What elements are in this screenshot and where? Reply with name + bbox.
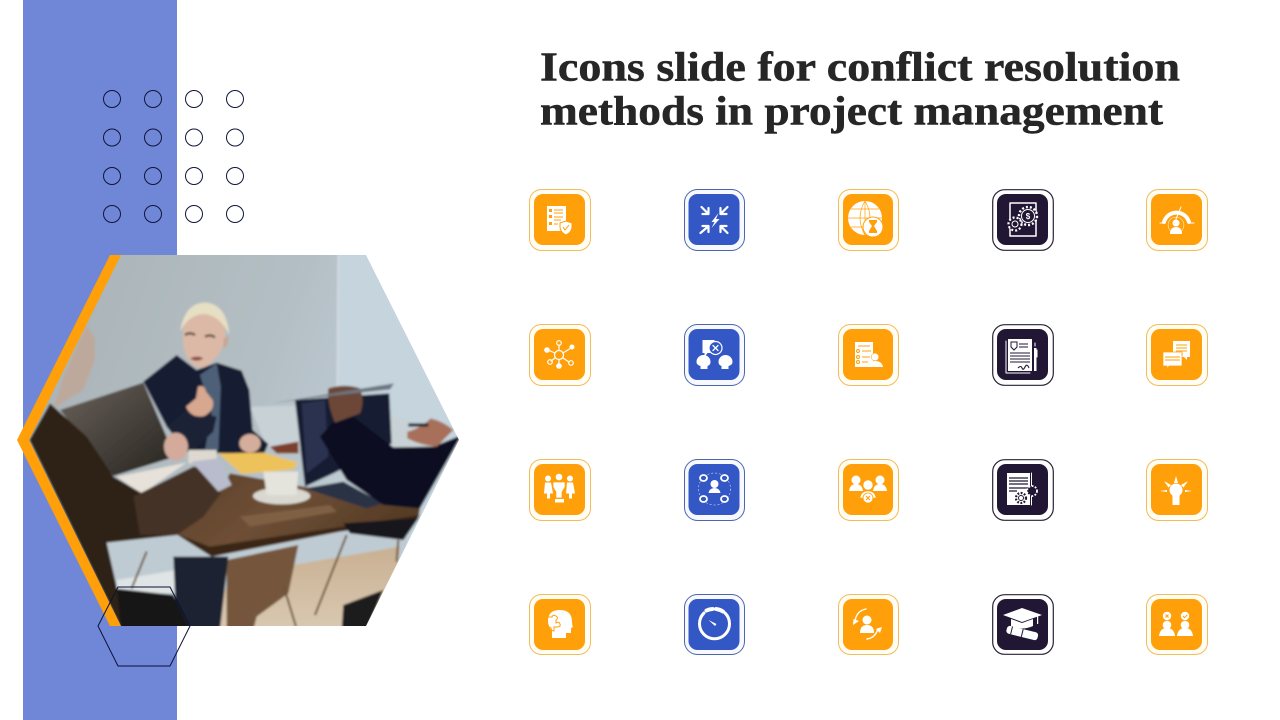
icon: globe with hourglass: [838, 190, 898, 250]
icon: team with trophy: [530, 460, 590, 520]
icon: two heads in conflict: [684, 324, 744, 386]
icon: idea bulb with rays: [1146, 460, 1208, 520]
icon: signed certificate with pen: [993, 325, 1053, 385]
icon: tablet with gears: $: [1026, 212, 1031, 221]
hexagon photo: meeting around a table: [20, 250, 467, 630]
icon: group of three with rejection mark: [838, 460, 898, 520]
icon: clipboard with person: [838, 324, 898, 386]
icon: tablet with gears: [993, 190, 1053, 250]
icon: person with rotating arrows: [838, 594, 898, 654]
blue side panel: [23, 0, 177, 720]
icon: graduation cap and diploma: [993, 595, 1053, 654]
icon: network nodes: [530, 324, 590, 386]
icon: inward arrows with lightning bolt: [684, 190, 744, 250]
icon: document with gears: [993, 460, 1053, 520]
icon: speedometer ring: [684, 594, 744, 654]
icon: two people with reject and approve marks: [1146, 594, 1208, 654]
icon: checklist with shield: [530, 190, 590, 250]
icon: gauge over person: [1146, 190, 1208, 250]
icon grid: [530, 190, 1208, 654]
title: [540, 44, 1180, 134]
orange hexagon edge: [17, 255, 122, 626]
title: methods in project management: [540, 88, 1163, 134]
icon: person with surrounding speech bubbles: [684, 460, 744, 520]
thin outline hexagon: [98, 587, 190, 666]
title: Icons slide for conflict resolution: [540, 44, 1180, 90]
dot grid decoration: [104, 90, 244, 222]
icon: chat bubbles: [1146, 324, 1208, 386]
icon: head with puzzle piece: [530, 594, 590, 654]
